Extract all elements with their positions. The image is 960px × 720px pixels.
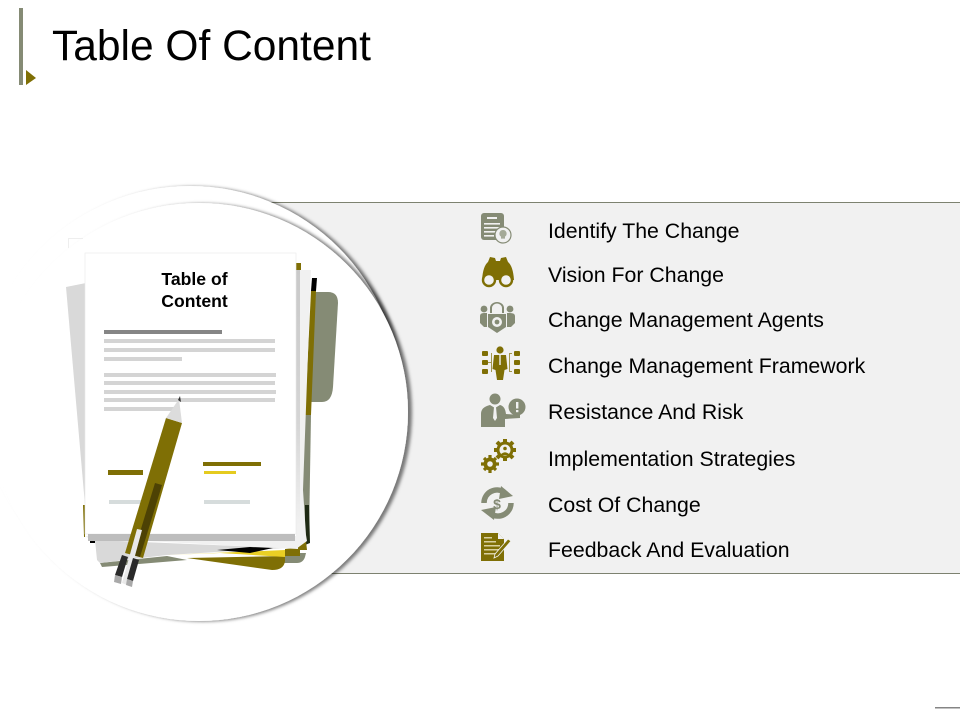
item: Change Management Framework: Change Management Framework	[548, 354, 866, 378]
icon: clipboard with bulb	[481, 213, 511, 243]
item: Cost Of Change: Cost Of Change	[548, 493, 701, 517]
item: Feedback And Evaluation: Feedback And Evaluation	[548, 538, 790, 562]
item: Vision For Change: Vision For Change	[548, 263, 724, 287]
icon: person with warning	[481, 394, 526, 427]
signature lines	[108, 462, 261, 504]
document heading: Table of	[161, 269, 228, 289]
illustration: document stack	[66, 238, 338, 570]
panel: content background	[250, 202, 960, 574]
list	[548, 219, 866, 562]
icon: gears	[481, 439, 516, 473]
title: Table Of Content	[52, 23, 371, 70]
item: Change Management Agents: Change Management Agents	[548, 308, 824, 332]
illustration: front document page	[85, 253, 296, 541]
document heading: Content	[161, 291, 228, 311]
item: Identify The Change: Identify The Change	[548, 219, 739, 243]
icon: cost cycle	[481, 486, 513, 520]
icon: feedback document	[481, 533, 511, 561]
illustration: pen	[114, 396, 182, 587]
icon: framework person	[482, 346, 520, 380]
icon: change agents	[480, 302, 515, 333]
page corner mark	[935, 707, 960, 708]
item: Implementation Strategies: Implementation Strategies	[548, 447, 795, 471]
icon: cost cycle: $	[493, 496, 501, 512]
document text lines	[104, 330, 276, 411]
icon: binoculars	[482, 257, 514, 286]
back circle	[0, 186, 400, 606]
item: Resistance And Risk: Resistance And Risk	[548, 400, 744, 424]
front circle	[0, 203, 408, 621]
title accent bar	[19, 8, 36, 85]
